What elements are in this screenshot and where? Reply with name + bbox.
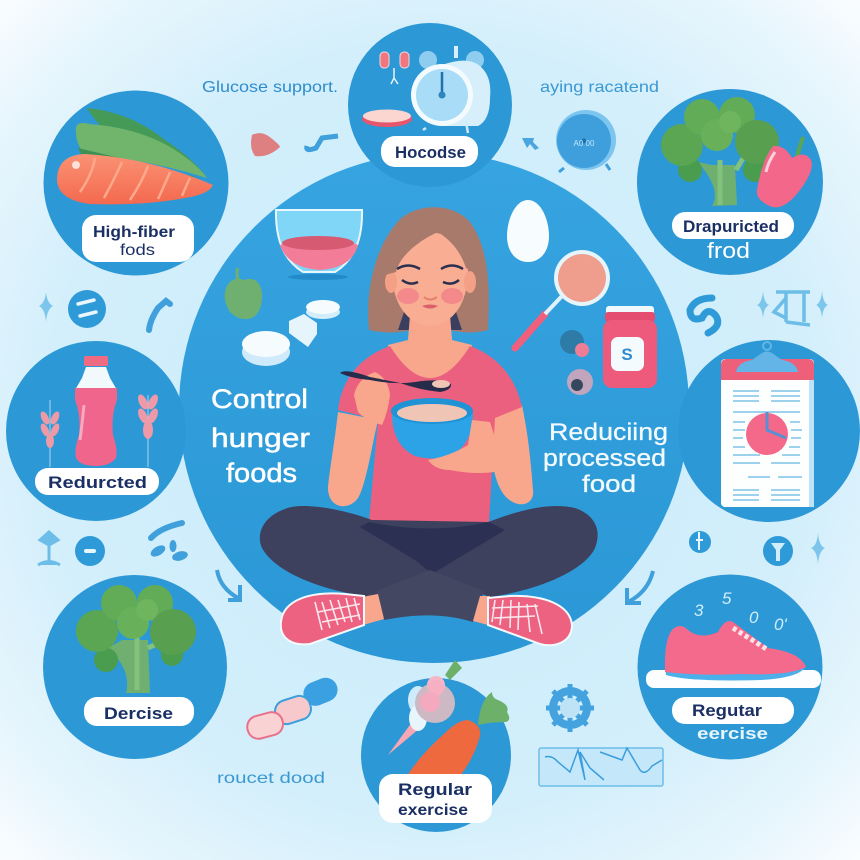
eyes and brows bbox=[397, 266, 463, 284]
icon: jar with S: S bbox=[621, 345, 633, 364]
icon: egg bbox=[507, 200, 549, 262]
icon: wheat right bbox=[136, 393, 160, 467]
icon: floating numbers: 5 bbox=[722, 589, 732, 608]
icon: floating numbers: 0' bbox=[774, 615, 787, 634]
panel: high-fiber foods bbox=[44, 90, 228, 276]
icon: green leaves bbox=[76, 108, 207, 178]
label: regutar: Regutar bbox=[692, 701, 762, 720]
icon: up post bbox=[38, 532, 60, 565]
caption: aying racatend: aying racatend bbox=[540, 79, 659, 96]
caption: glucose support: Glucose support. bbox=[202, 79, 338, 96]
icon: floating numbers: 3 bbox=[694, 601, 704, 620]
icon: circle with T bbox=[763, 536, 793, 566]
text: reducing processed food: Reduciing bbox=[549, 419, 668, 446]
icon: almond bbox=[251, 133, 280, 156]
arrow: right curved bbox=[627, 571, 653, 603]
text: reducing processed food: processed bbox=[543, 445, 666, 472]
label: regular exercise: exercise bbox=[398, 802, 468, 819]
icon: bottle bbox=[75, 356, 117, 466]
shirt bbox=[338, 346, 522, 528]
icon: platform bbox=[646, 670, 821, 688]
arrow: left curved bbox=[217, 570, 240, 600]
icon: pepper bbox=[757, 137, 812, 207]
label: eercise: eercise bbox=[697, 724, 768, 743]
panel: hocodse clock bbox=[348, 23, 512, 187]
legs bbox=[260, 506, 598, 597]
icon: small blue clock: A0 00 bbox=[574, 139, 595, 148]
icon: carrot bbox=[407, 692, 509, 776]
label: drapuricted: Drapuricted bbox=[683, 217, 779, 236]
central circle panel bbox=[179, 153, 689, 663]
label: dercise bbox=[84, 697, 194, 726]
icon: glass bowl bbox=[276, 210, 362, 280]
label: frod: frod bbox=[707, 238, 750, 263]
label: redurcted: Redurcted bbox=[48, 473, 147, 492]
spoon food bbox=[432, 380, 450, 388]
left arm bbox=[328, 412, 378, 506]
panel: dercise broccoli bbox=[43, 575, 227, 759]
right arm bbox=[490, 405, 533, 504]
icon: clipboard bbox=[721, 342, 814, 507]
panel: regular exercise carrot bbox=[361, 660, 511, 832]
icon: carrot bbox=[57, 154, 213, 204]
label: redurcted bbox=[35, 468, 159, 495]
icon: circle with equals bbox=[68, 290, 106, 328]
spoon bbox=[340, 371, 451, 392]
cheeks bbox=[397, 288, 463, 304]
icon: pink capsules bbox=[380, 52, 409, 84]
panel: redurcted bottle bbox=[6, 341, 186, 521]
left hand bbox=[354, 372, 390, 425]
text: reducing processed food bbox=[543, 419, 668, 498]
icon: floating numbers bbox=[694, 589, 787, 634]
face bbox=[392, 232, 468, 326]
icon: pink-handled spoon bbox=[515, 250, 610, 348]
panel: clipboard chart bbox=[678, 340, 860, 522]
neck and chest bbox=[388, 315, 472, 395]
bowl bbox=[391, 398, 473, 458]
icon: small pin circle bbox=[689, 531, 711, 553]
label: dercise: Dercise bbox=[104, 704, 173, 723]
hip shadow bbox=[360, 522, 505, 574]
label: high-fiber foods: High-fiber bbox=[93, 224, 175, 241]
icon: red disk bbox=[362, 110, 412, 127]
icon: jar with S bbox=[603, 306, 657, 388]
hair bbox=[368, 207, 489, 332]
icon: tiny arrow bbox=[522, 138, 539, 150]
icon: lower right diamond bbox=[811, 533, 825, 564]
icon: gear bbox=[546, 684, 594, 732]
text: control hunger foods: hunger bbox=[211, 423, 310, 453]
icon: right diamond two bbox=[816, 291, 828, 318]
left shoe bbox=[281, 593, 364, 644]
icon: right diamond one bbox=[757, 291, 769, 318]
icon: white tablets bbox=[242, 300, 340, 366]
icon: floating numbers: 0 bbox=[749, 608, 759, 627]
icon: hook arrow bbox=[149, 301, 170, 330]
text: control hunger foods bbox=[211, 384, 310, 488]
text: control hunger foods: foods bbox=[226, 458, 297, 488]
icon: wheat left bbox=[39, 400, 61, 467]
label: drapuricted bbox=[672, 212, 794, 239]
icon: broccoli bbox=[661, 97, 779, 206]
label: regular exercise: Regular bbox=[398, 780, 472, 799]
icon: line chart bbox=[539, 748, 663, 786]
icon: circle with minus bbox=[75, 536, 105, 566]
icon: radish flower bbox=[388, 660, 462, 755]
hair fringe bbox=[385, 231, 475, 275]
right hand bbox=[428, 420, 505, 473]
label: hocodse: Hocodse bbox=[395, 143, 466, 162]
icon: dash and capsules bbox=[149, 523, 189, 562]
ankles bbox=[362, 594, 490, 625]
under hair bbox=[398, 300, 462, 330]
icon: small blue clock bbox=[556, 110, 616, 172]
icon: green pepper bbox=[225, 268, 262, 319]
label: high-fiber foods: fods bbox=[120, 242, 155, 259]
icon: alarm clock bbox=[411, 46, 490, 133]
label: high-fiber foods bbox=[82, 215, 194, 262]
caption: roucet dood: roucet dood bbox=[217, 770, 325, 787]
icon: broccoli bbox=[76, 585, 196, 693]
nose and mouth bbox=[422, 297, 438, 308]
label: regular exercise bbox=[379, 774, 492, 823]
icon: shoe bbox=[665, 621, 806, 680]
icon: swirl bbox=[690, 298, 718, 333]
label: regutar bbox=[672, 697, 794, 724]
text: reducing processed food: food bbox=[582, 471, 636, 498]
icon: pills chain bbox=[245, 674, 341, 741]
ears bbox=[385, 271, 476, 293]
icon: gate glyph bbox=[774, 292, 810, 325]
panel: drapuricted frod bbox=[637, 89, 823, 275]
icon: small berries bbox=[560, 330, 593, 395]
panel: regutar eercise shoe bbox=[638, 574, 822, 760]
text: control hunger foods: Control bbox=[211, 384, 308, 414]
icon: left diamond bbox=[39, 292, 53, 322]
right shoe bbox=[488, 596, 572, 645]
icon: hook shape bbox=[307, 136, 338, 150]
figure: woman eating bbox=[260, 207, 598, 645]
lower shins bbox=[376, 570, 484, 622]
label: hocodse bbox=[381, 136, 478, 167]
